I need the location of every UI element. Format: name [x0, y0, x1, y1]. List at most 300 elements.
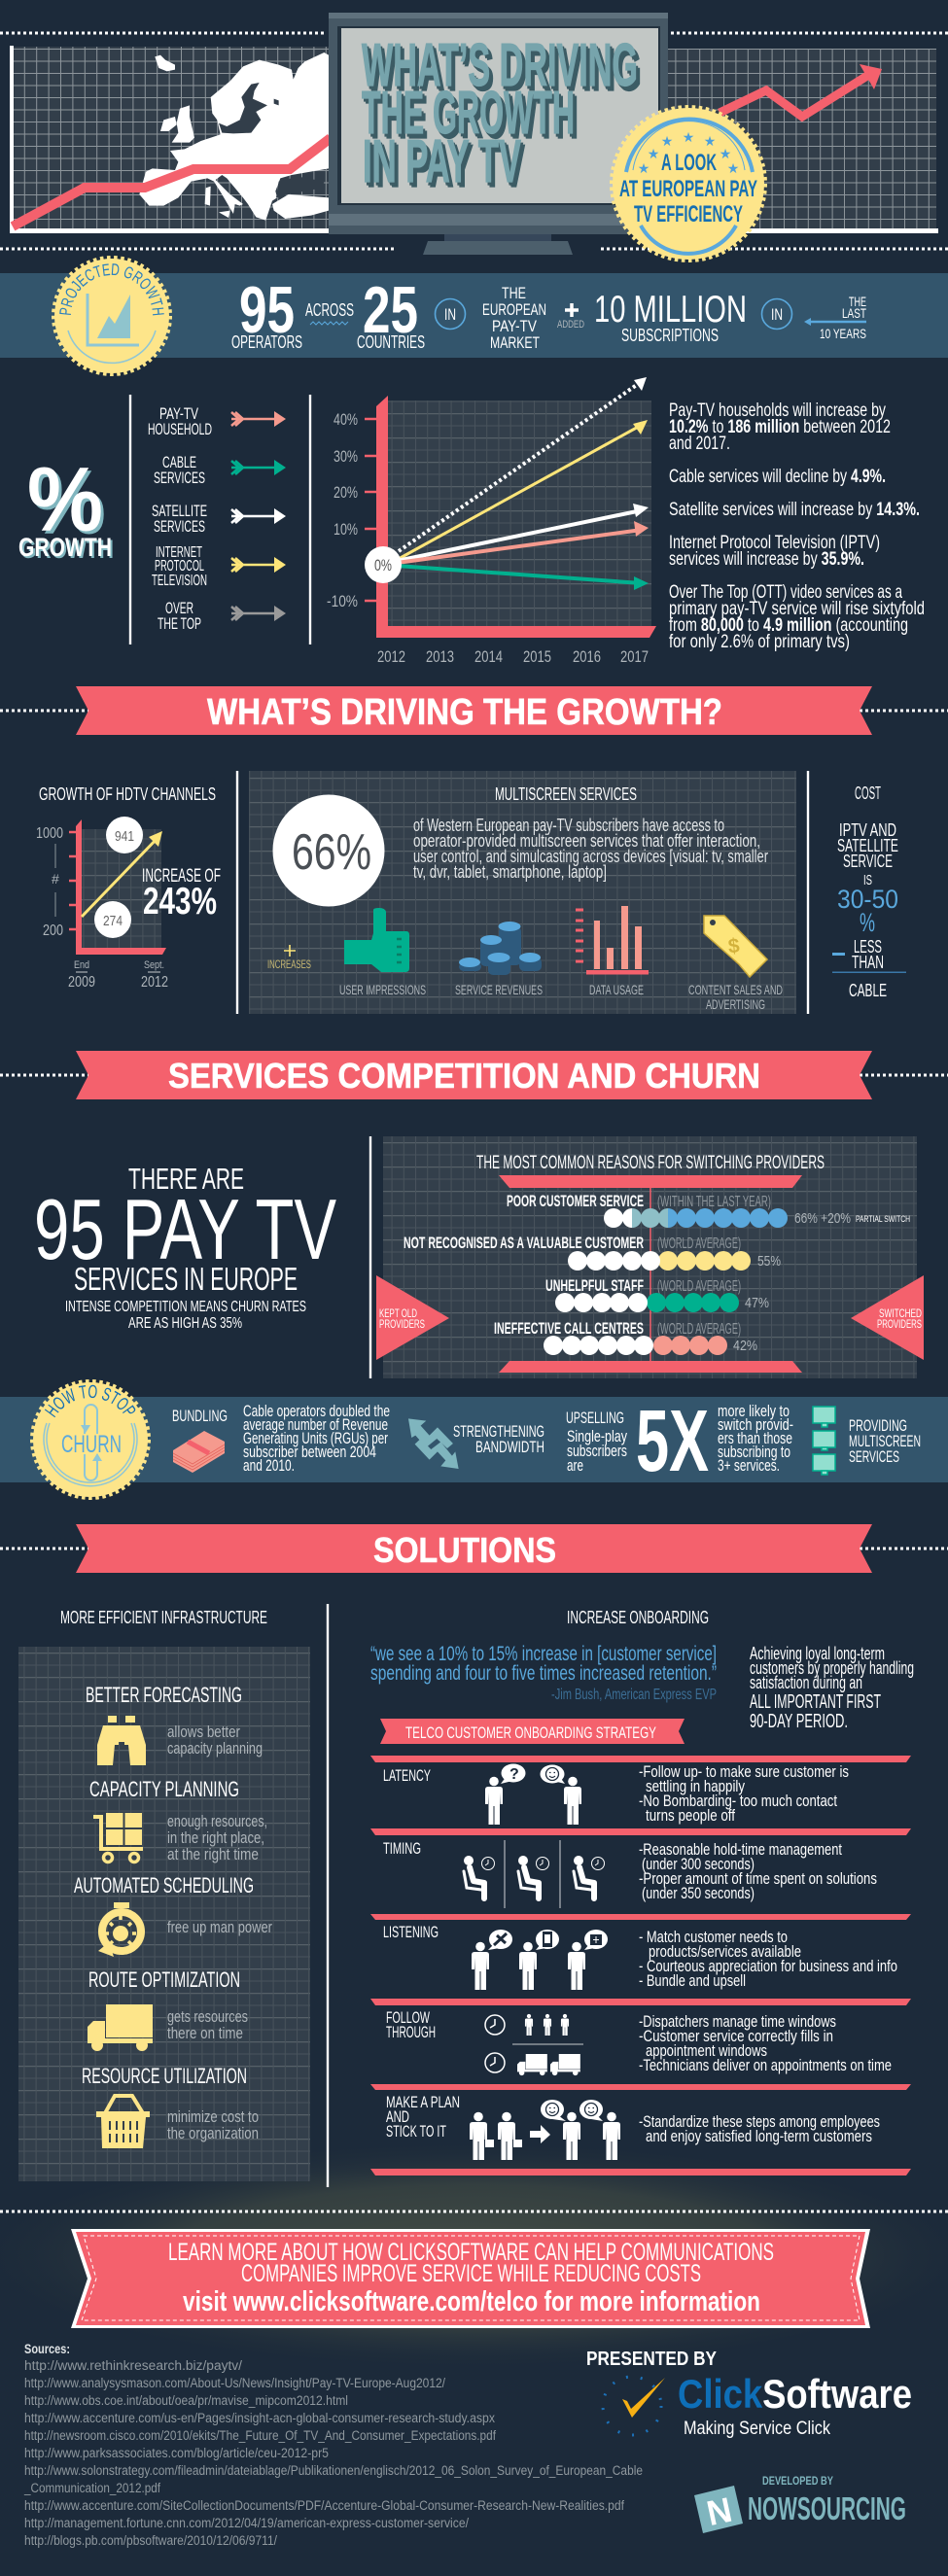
speech bubbles	[541, 2100, 603, 2121]
icon labels: DATA USAGE	[589, 982, 644, 997]
badge: a look at European pay TV efficiency: TV EFFICIENCY	[634, 201, 743, 227]
upselling: more likely to	[718, 1402, 790, 1420]
mini chart: Sept.	[144, 959, 164, 971]
upselling: ers than those	[718, 1429, 792, 1447]
row: unhelpful staff: 47%	[745, 1295, 769, 1311]
banner: what's driving the growth	[0, 686, 948, 735]
item: capacity planning	[89, 1777, 267, 1863]
triangle: kept old providers	[376, 1275, 449, 1360]
bundling	[172, 1402, 390, 1475]
item: automated scheduling: AUTOMATED SCHEDULING	[74, 1873, 254, 1897]
in circle: IN	[771, 305, 783, 324]
row: poor customer service: 66% +20%	[794, 1210, 851, 1227]
quote: “we see a 10% to 15% increase in [customer service]	[370, 1643, 717, 1665]
developed by NowSourcing: DEVELOPED BY	[762, 2474, 833, 2488]
title	[362, 32, 642, 200]
row: follow through	[386, 2008, 892, 2075]
stat: 10 million subscriptions	[594, 289, 747, 345]
growth descriptions: Cable services will decline by 4.9%.	[669, 467, 886, 487]
row: timing: -Proper amount of time spent on solutions	[639, 1869, 877, 1888]
icon: monitors	[813, 1407, 835, 1475]
developed by NowSourcing	[694, 2474, 906, 2533]
panel: cost: SATELLITE	[837, 836, 898, 855]
item: route optimization: ROUTE OPTIMIZATION	[88, 1967, 240, 1992]
the European pay-TV market: EUROPEAN	[482, 300, 546, 319]
text block: there are 95 pay tv services: THERE ARE	[128, 1162, 244, 1196]
mini chart: 1000	[36, 825, 63, 842]
row: poor customer service: POOR CUSTOMER SERVICE	[507, 1192, 644, 1210]
triangle: kept old providers: KEPT OLD	[379, 1306, 417, 1320]
row: listening: - Bundle and upsell	[639, 1971, 746, 1990]
mini chart: 2009	[68, 974, 95, 991]
row: poor customer service: (WITHIN THE LAST YEAR)	[657, 1194, 771, 1210]
presented by ClickSoftware: ClickSoftware	[678, 2371, 912, 2417]
in circle	[762, 299, 791, 329]
growth descriptions	[669, 400, 925, 652]
mini chart: 941	[115, 828, 134, 845]
title: IN PAY TV	[367, 133, 525, 200]
upselling: switch provid-	[718, 1415, 793, 1434]
badge: a look at European pay TV efficiency	[613, 108, 764, 260]
item: resource utilization	[82, 2064, 259, 2148]
growth descriptions: Internet Protocol Television (IPTV)	[669, 533, 880, 553]
sources: http://www.accenture.com/SiteCollectionDocuments/PDF/Accenture-Global-Consumer-Research-New-Realities.pdf	[24, 2498, 624, 2513]
row: poor customer service	[507, 1192, 910, 1228]
badge: a look at European pay TV efficiency: ★	[661, 134, 673, 150]
icon: zigzag arrows	[408, 1418, 459, 1469]
sources: http://www.obs.coe.int/about/oea/pr/mavise_mipcom2012.html	[24, 2393, 348, 2408]
quote	[370, 1643, 717, 1703]
speech bubbles: ?	[509, 1766, 519, 1783]
dotted separator	[0, 2210, 948, 2212]
title: WHAT’S DRIVING	[366, 37, 642, 104]
growth descriptions: Satellite services will increase by 14.3%.	[669, 500, 920, 520]
panel: growth of HDTV channels	[36, 784, 221, 991]
upselling: are	[567, 1456, 583, 1475]
panel: cost: %	[860, 908, 875, 937]
mini chart	[36, 817, 168, 991]
triangle: kept old providers: PROVIDERS	[379, 1317, 425, 1331]
panel: cost: IS	[863, 872, 872, 888]
triangle: switched providers	[851, 1275, 924, 1360]
icon labels: USER IMPRESSIONS	[339, 982, 426, 997]
upselling: subscribers	[567, 1442, 627, 1460]
the last 10 years: 10 YEARS	[820, 326, 866, 341]
row: listening: - Match customer needs to	[639, 1928, 788, 1946]
item: capacity planning: CAPACITY PLANNING	[89, 1777, 239, 1801]
logo mark	[694, 2486, 743, 2533]
ribbon: telco strategy: TELCO CUSTOMER ONBOARDING STRATEGY	[405, 1723, 656, 1742]
growth descriptions: services will increase by 35.9%.	[669, 549, 864, 570]
panel: right grid with rising arrow	[668, 49, 938, 233]
title: WHAT’S DRIVING	[364, 35, 640, 102]
speech bubbles	[488, 1930, 608, 1950]
row: not recognised as a valuable customer: 55%	[757, 1253, 781, 1270]
axis labels: 2012	[377, 647, 405, 666]
clocks	[485, 2015, 505, 2072]
panel: cost: SERVICE	[843, 852, 893, 871]
icon: price tag	[704, 916, 767, 977]
axis labels	[327, 410, 649, 666]
icon: bar chart	[576, 906, 649, 974]
row: unhelpful staff: UNHELPFUL STAFF	[545, 1276, 644, 1295]
in circle: IN	[444, 305, 456, 324]
axis labels: 10%	[334, 520, 358, 539]
background glow	[0, 2139, 948, 2372]
logo mark: N	[703, 2489, 735, 2533]
multiscreen text: operator-provided multiscreen services that offer interaction,	[413, 831, 760, 851]
item: automated scheduling	[74, 1873, 272, 1957]
strategy dividers	[370, 1756, 911, 2176]
sources: http://www.accenture.com/us-en/Pages/insight-acn-global-consumer-research-study.aspx	[24, 2411, 495, 2425]
row: follow through: -Customer service correctly fills in	[639, 2027, 833, 2045]
zero marker: 0%	[374, 556, 392, 574]
badge: a look at European pay TV efficiency: ★	[638, 161, 650, 177]
row: unhelpful staff: (WORLD AVERAGE)	[657, 1278, 741, 1295]
row: unhelpful staff	[545, 1276, 769, 1312]
upselling: UPSELLING	[566, 1409, 624, 1427]
growth line chart	[327, 377, 656, 666]
axis labels: 2017	[620, 647, 649, 666]
zero marker	[365, 546, 402, 583]
increase of 243%: 243%	[143, 881, 217, 922]
stat: 95 operators: OPERATORS	[231, 332, 302, 352]
mini chart: 2012	[141, 974, 168, 991]
icon: thumbs up	[344, 908, 409, 972]
plus added	[557, 303, 584, 331]
growth descriptions: and 2017.	[669, 434, 730, 454]
bundling: average number of Revenue	[243, 1415, 388, 1434]
row: latency: LATENCY	[383, 1766, 431, 1785]
badge: how to stop churn	[30, 1379, 151, 1500]
legend: internet protocol television	[152, 544, 286, 589]
stat: 25 countries: 25	[363, 273, 418, 347]
legend: internet protocol television: TELEVISION	[152, 573, 207, 589]
banner: solutions	[0, 1524, 948, 1573]
title: IN PAY TV	[365, 131, 523, 198]
row: follow through: THROUGH	[386, 2023, 436, 2041]
legend: internet protocol television: INTERNET	[156, 544, 202, 561]
axis labels: 2013	[426, 647, 454, 666]
text block: achieving loyal customers: satisfaction during an	[750, 1673, 862, 1692]
title: THE GROWTH	[362, 80, 575, 147]
panel: cost: THAN	[852, 953, 884, 972]
stat: across	[305, 300, 354, 325]
item: route optimization	[88, 1967, 248, 2051]
the European pay-TV market: THE	[502, 284, 526, 302]
item: route optimization: gets resources	[167, 2007, 248, 2026]
TV set	[329, 13, 668, 255]
badge: projected growth	[52, 256, 172, 376]
triangle: switched providers: PROVIDERS	[877, 1317, 922, 1331]
row: timing: TIMING	[383, 1839, 421, 1858]
axis labels: 2015	[523, 647, 551, 666]
band: key stats	[0, 256, 948, 376]
call to action ribbon: visit www.clicksoftware.com/telco for more information	[183, 2286, 760, 2317]
growth descriptions: 10.2% to 186 million between 2012	[669, 417, 891, 437]
the European pay-TV market: MARKET	[490, 333, 540, 352]
legend: pay-tv household: HOUSEHOLD	[148, 420, 212, 438]
plus added: ADDED	[557, 319, 584, 331]
legend: cable services: SERVICES	[154, 469, 205, 487]
upselling: 3+ services.	[718, 1456, 780, 1475]
item: route optimization: there on time	[167, 2024, 243, 2042]
heading: more efficient infrastructure: MORE EFFICIENT INFRASTRUCTURE	[60, 1608, 267, 1627]
panel: cost: LESS	[854, 937, 882, 957]
panel: growth of HDTV channels: GROWTH OF HDTV CHANNELS	[39, 784, 216, 804]
stat: across: ACROSS	[305, 300, 354, 320]
sources: http://management.fortune.cnn.com/2012/04/19/american-express-customer-service/	[24, 2516, 469, 2530]
panel: multiscreen services	[237, 771, 808, 1014]
sources	[23, 2341, 643, 2548]
triangle: switched providers: SWITCHED	[879, 1306, 922, 1320]
item: better forecasting: BETTER FORECASTING	[86, 1683, 242, 1707]
badge: projected growth: PROJECTED GROWTH	[59, 263, 164, 315]
axis labels: 2016	[573, 647, 601, 666]
badge: a look at European pay TV efficiency: ★	[727, 161, 739, 177]
row: timing	[383, 1839, 877, 1908]
title: WHAT’S DRIVING	[362, 32, 638, 99]
row: ineffective call centres	[494, 1319, 757, 1355]
map of Europe	[139, 52, 329, 221]
panel: reasons for switching providers	[370, 1136, 924, 1378]
sources: http://www.parksassociates.com/blog/article/ceu-2012-pr5	[24, 2446, 329, 2460]
row: listening	[383, 1923, 897, 1990]
banner: services competition and churn	[0, 1051, 948, 1099]
increase of 243%: INCREASE OF	[142, 866, 221, 887]
row: not recognised as a valuable customer: (WORLD AVERAGE)	[657, 1236, 741, 1252]
upselling: 5X	[636, 1393, 709, 1490]
increase of 243%	[142, 866, 221, 922]
badge: a look at European pay TV efficiency: ★	[720, 147, 731, 162]
mini chart: End	[74, 959, 89, 971]
panel: infrastructure	[18, 1647, 310, 2181]
row: ineffective call centres: 42%	[733, 1338, 757, 1354]
providing multiscreen services: PROVIDING	[849, 1416, 907, 1435]
mini chart: 274	[103, 913, 123, 929]
icon labels: SERVICE REVENUES	[455, 982, 543, 997]
row: latency: settling in happily	[646, 1777, 745, 1795]
row: make a plan	[386, 2093, 880, 2160]
sources: http://blogs.pb.com/pbsoftware/2010/12/06/9711/	[24, 2533, 277, 2548]
strengthening bandwidth: STRENGTHENING	[453, 1422, 544, 1441]
logo mark	[603, 2377, 665, 2435]
row: timing: (under 300 seconds)	[642, 1855, 755, 1873]
text block: achieving loyal customers	[750, 1644, 914, 1732]
heading: increase onboarding: INCREASE ONBOARDING	[567, 1608, 709, 1627]
badge: a look at European pay TV efficiency: AT EUROPEAN PAY	[619, 176, 757, 202]
strengthening bandwidth	[408, 1418, 544, 1469]
upselling	[566, 1393, 793, 1490]
66% circle: 66%	[292, 824, 371, 881]
panel: left grid with Europe map	[10, 46, 331, 233]
banner: solutions: SOLUTIONS	[373, 1530, 556, 1570]
upselling: subscribing to	[718, 1443, 790, 1461]
icon: money stack	[173, 1431, 225, 1473]
the last 10 years: LAST	[842, 305, 866, 321]
row: timing: -Reasonable hold-time management	[639, 1840, 842, 1859]
item: automated scheduling: free up man power	[167, 1918, 272, 1936]
row: latency: -Follow up- to make sure customer is	[639, 1762, 849, 1781]
providing multiscreen services	[813, 1407, 921, 1475]
panel: cost: CABLE	[849, 981, 887, 1000]
legend: internet protocol television: PROTOCOL	[155, 558, 204, 574]
panel: multiscreen services: MULTISCREEN SERVICES	[495, 784, 637, 804]
title: THE GROWTH	[364, 83, 577, 150]
text block: there are 95 pay tv services	[34, 1162, 336, 1332]
row: follow through: FOLLOW	[386, 2008, 430, 2027]
text block: there are 95 pay tv services: 95 PAY TV	[34, 1181, 336, 1277]
badge: a look at European pay TV efficiency: ★	[648, 147, 659, 162]
sources: _Communication_2012.pdf	[23, 2481, 160, 2495]
banner: what's driving the growth: WHAT’S DRIVING THE GROWTH?	[207, 692, 722, 733]
banner: services competition and churn: SERVICES COMPETITION AND CHURN	[168, 1056, 760, 1096]
legend: pay-tv household	[148, 404, 286, 438]
legend: cable services: CABLE	[162, 453, 196, 471]
legend: over the top	[158, 599, 286, 633]
item: resource utilization: the organization	[167, 2124, 259, 2142]
panel: cost	[832, 783, 906, 1000]
presented by ClickSoftware	[586, 2349, 912, 2439]
row: listening: products/services available	[649, 1942, 801, 1961]
growth descriptions: for only 2.6% of primary tvs)	[669, 632, 850, 652]
row: listening: LISTENING	[383, 1923, 439, 1941]
strengthening bandwidth: BANDWIDTH	[475, 1438, 544, 1456]
legend: over the top: THE TOP	[158, 614, 201, 633]
increases label: INCREASES	[267, 957, 311, 971]
call to action ribbon: COMPANIES IMPROVE SERVICE WHILE REDUCING COSTS	[241, 2260, 701, 2287]
bundling: and 2010.	[243, 1456, 295, 1475]
clocks	[482, 1857, 605, 1870]
bundling: Generating Units (RGUs) per	[243, 1429, 388, 1447]
presented by ClickSoftware: Making Service Click	[684, 2419, 830, 2439]
bundling: subscriber between 2004	[243, 1443, 376, 1461]
badge: a look at European pay TV efficiency: ★	[704, 134, 716, 150]
item: better forecasting: capacity planning	[167, 1739, 263, 1758]
row: poor customer service: PARTIAL SWITCH	[856, 1214, 910, 1224]
% growth label: GROWTH	[18, 533, 112, 562]
upselling: Single-play	[567, 1427, 627, 1445]
header	[0, 13, 948, 260]
mini chart: 200	[43, 922, 63, 939]
stat: 25 countries: COUNTRIES	[357, 332, 425, 352]
stat: 95 operators: 95	[239, 273, 295, 347]
row: latency: turns people off	[646, 1806, 735, 1825]
text block: there are 95 pay tv services: SERVICES IN EUROPE	[74, 1261, 298, 1297]
panel: cost: IPTV AND	[839, 820, 896, 840]
% growth label: %	[30, 451, 106, 553]
the last 10 years: THE	[849, 294, 866, 309]
item: capacity planning: enough resources,	[167, 1812, 267, 1830]
presented by ClickSoftware: PRESENTED BY	[586, 2349, 718, 2370]
item: capacity planning: at the right time	[167, 1845, 259, 1863]
badge: a look at European pay TV efficiency: A LOOK	[661, 150, 717, 176]
the European pay-TV market	[482, 284, 546, 352]
axis labels: 20%	[334, 483, 358, 502]
row: latency	[383, 1762, 849, 1825]
mini chart: #	[52, 871, 59, 887]
axis labels: 2014	[474, 647, 503, 666]
band: how to stop churn	[0, 1379, 948, 1500]
item: better forecasting: allows better	[167, 1723, 240, 1741]
title: THE GROWTH	[366, 85, 579, 152]
multiscreen text: of Western European pay-TV subscribers have access to	[413, 816, 724, 835]
axis labels: 30%	[334, 447, 358, 466]
multiscreen text: tv, dvr, tablet, smartphone, laptop]	[413, 862, 607, 882]
item: resource utilization: minimize cost to	[167, 2107, 259, 2126]
row: timing: (under 350 seconds)	[642, 1884, 755, 1902]
multiscreen text	[413, 816, 768, 882]
legend: cable services	[154, 453, 286, 487]
text block: achieving loyal customers: Achieving loyal long-term	[750, 1644, 885, 1663]
legend: pay-tv household: PAY-TV	[159, 404, 198, 423]
icon labels: CONTENT SALES AND	[688, 982, 783, 997]
growth descriptions: from 80,000 to 4.9 million (accounting	[669, 615, 908, 636]
divider	[327, 1604, 329, 2187]
row: make a plan: MAKE A PLAN	[386, 2093, 460, 2111]
bundling: BUNDLING	[172, 1407, 228, 1425]
row: make a plan: STICK TO IT	[386, 2122, 446, 2141]
row: not recognised as a valuable customer: NOT RECOGNISED AS A VALUABLE CUSTOMER	[404, 1234, 644, 1252]
speech bubbles	[501, 1763, 565, 1784]
66% circle	[272, 795, 385, 906]
panel: cost: 30-50	[837, 885, 898, 914]
quote: -Jim Bush, American Express EVP	[551, 1687, 717, 1703]
icon labels	[339, 982, 783, 1012]
row: ineffective call centres: INEFFECTIVE CALL CENTRES	[494, 1319, 644, 1338]
the European pay-TV market: PAY-TV	[492, 317, 538, 335]
increases label	[267, 945, 311, 971]
badge: a look at European pay TV efficiency: ★	[683, 130, 694, 146]
in circle	[436, 299, 465, 329]
chart legend	[130, 395, 310, 644]
legend: satellite services: SERVICES	[154, 517, 205, 536]
stat: 10 million subscriptions: SUBSCRIPTIONS	[621, 326, 719, 345]
row: ineffective call centres: (WORLD AVERAGE)	[657, 1321, 741, 1338]
row: not recognised as a valuable customer	[404, 1234, 781, 1271]
item: better forecasting	[86, 1683, 263, 1765]
row: follow through: appointment windows	[646, 2041, 767, 2060]
call to action ribbon	[71, 2229, 870, 2328]
legend: satellite services	[152, 502, 286, 536]
row: make a plan: AND	[386, 2107, 409, 2126]
icon labels: ADVERTISING	[706, 996, 765, 1012]
the last 10 years	[804, 294, 866, 341]
ribbon: telco strategy	[380, 1719, 685, 1744]
% growth label: %	[27, 448, 103, 550]
row: follow through: -Dispatchers manage time windows	[639, 2012, 836, 2031]
badge: how to stop churn: CHURN	[61, 1431, 122, 1458]
item: capacity planning: in the right place,	[167, 1828, 264, 1847]
axis labels: -10%	[327, 592, 358, 610]
quote: spending and four to five times increased retention.”	[370, 1662, 717, 1685]
bundling: Cable operators doubled the	[243, 1402, 390, 1420]
sources: Sources:	[24, 2341, 70, 2356]
badge: how to stop churn: HOW TO STOP	[45, 1384, 136, 1417]
text block: there are 95 pay tv services: ARE AS HIGH AS 35%	[128, 1315, 242, 1332]
axis labels: 40%	[334, 410, 358, 429]
multiscreen text: user control, and simulcasting across devices [visual: tv, smaller	[413, 847, 768, 866]
sources: http://www.analysysmason.com/About-Us/News/Insight/Pay-TV-Europe-Aug2012/	[24, 2376, 445, 2390]
text block: there are 95 pay tv services: INTENSE COMPETITION MEANS CHURN RATES	[65, 1299, 306, 1315]
panel: cost: COST	[855, 783, 881, 803]
stat: 10 million subscriptions: 10 MILLION	[594, 289, 747, 331]
row: latency: -No Bombarding- too much contact	[639, 1792, 837, 1810]
row: make a plan: and enjoy satisfied long-term customers	[646, 2127, 872, 2145]
legend: satellite services: SATELLITE	[152, 502, 207, 520]
title: IN PAY TV	[363, 128, 521, 195]
chart arrows	[397, 377, 649, 590]
